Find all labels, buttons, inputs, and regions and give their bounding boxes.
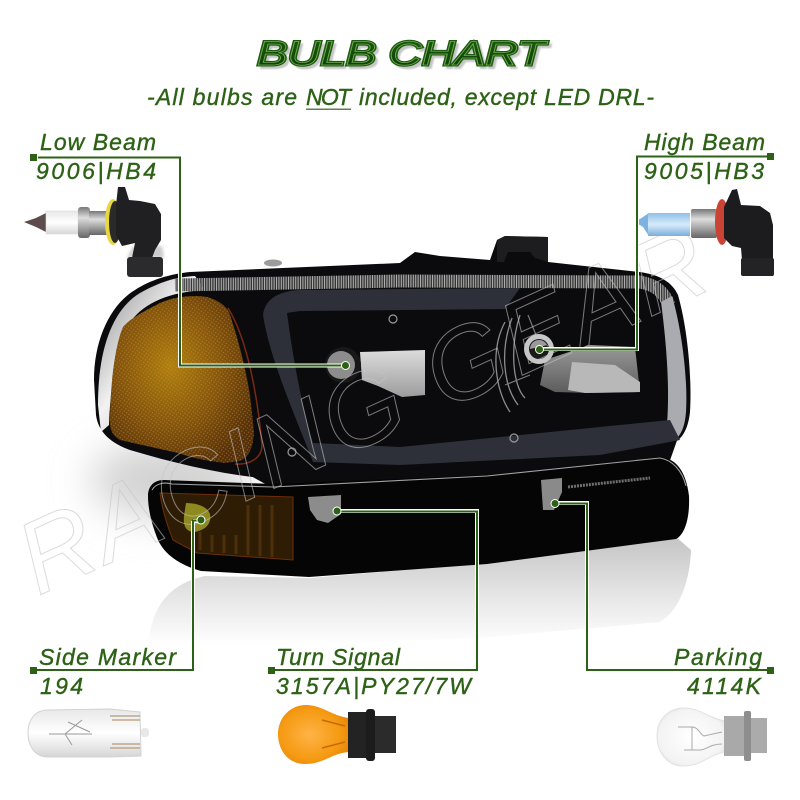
parking leader line [551,500,774,674]
title [257,35,551,76]
subtitle [147,84,654,110]
turn signal label: Turn Signal [276,644,401,670]
headlight housing [94,236,690,480]
ground shadow behind lamp [90,442,250,518]
turn signal leader line [268,507,477,674]
parking socket patch [541,478,562,510]
icon: 9006 halogen bulb [24,187,164,277]
top mounting bracket [497,236,548,262]
amber corner lens [110,296,262,464]
adjuster screw markers [288,315,518,456]
side marker leader line [30,516,205,674]
low beam bulb number: 9006|HB4 [36,158,156,184]
smoked bezel [263,288,680,465]
high beam bulb number: 9005|HB3 [644,158,764,184]
parking callout [551,500,774,766]
subtitle: NOT [306,84,353,110]
title: BULB CHART [257,35,548,73]
parking label: Parking [674,644,762,670]
side marker callout [28,516,205,757]
top silver adjuster [264,260,282,266]
high beam leader line [536,153,774,354]
low beam callout [24,129,350,370]
housing joint behind signal lamp [240,432,680,492]
clear outer corner lens [98,276,205,432]
parking bulb number: 4114K [687,673,763,699]
turn signal callout [268,507,477,764]
chrome ribbed strip [175,281,669,305]
parking and turn signal lamp [148,457,689,577]
icon: 9005 blue halogen bulb [635,189,774,276]
clear right edge [661,296,686,438]
lamp reflection on floor [148,537,691,645]
title: BULB CHART [257,35,548,73]
lamp top rim highlight [152,458,686,490]
low beam leader line [30,154,350,370]
turn signal bulb number: 3157A|PY27/7W [276,673,473,699]
title: BULB CHART [260,38,551,76]
headlight assembly [94,236,690,492]
subtitle: included, except LED DRL- [359,84,654,110]
high beam callout [536,129,774,354]
high beam bulb socket [524,334,554,364]
icon: 4114K clear bulb [657,708,767,766]
icon: 194 wedge bulb [28,709,149,757]
icon: 3157A amber bulb [278,705,396,764]
high beam label: High Beam [644,129,765,155]
side marker label: Side Marker [39,644,177,670]
low beam reflector [360,350,425,397]
side marker bulb number: 194 [40,673,83,699]
turn signal socket patch [308,495,341,523]
amber signal section [160,493,293,560]
lamp housing [148,457,689,577]
high beam reflector [496,315,640,412]
low beam bulb socket [325,347,361,383]
low beam label: Low Beam [40,129,156,155]
watermark: RACING GEAR [0,203,725,616]
lamp moulded lettering mark [568,478,650,487]
subtitle: -All bulbs are [147,84,297,110]
